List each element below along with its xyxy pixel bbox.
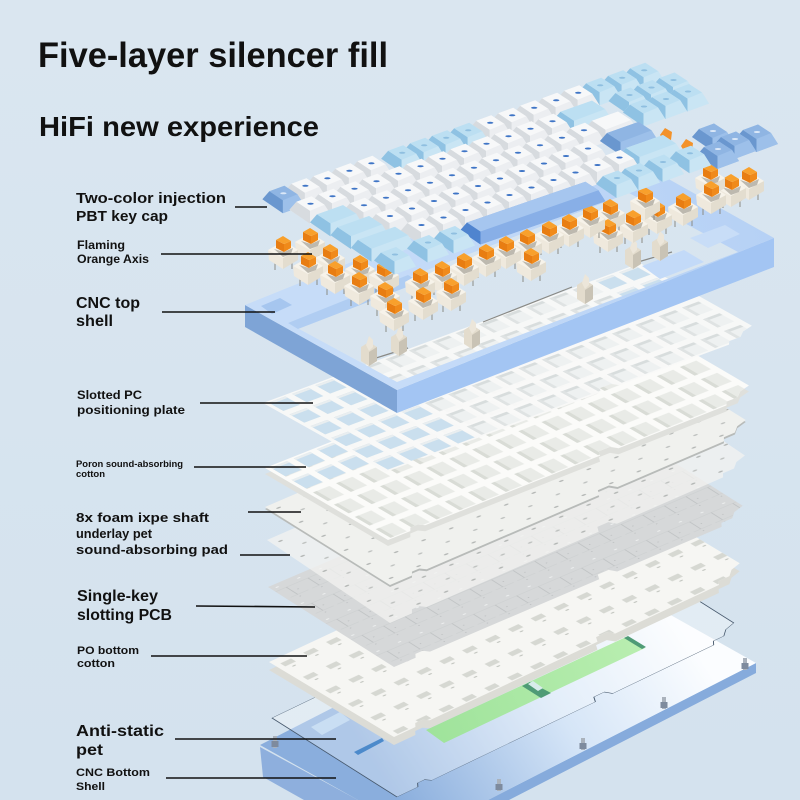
label: PC plate: Slotted PC (77, 390, 142, 402)
label: foam and underlay (76, 510, 301, 557)
label: orange axis (77, 240, 312, 266)
label: PC plate: positioning plate (77, 405, 185, 417)
label: key cap: PBT key cap (76, 208, 168, 225)
label: PO cotton: PO bottom (77, 645, 139, 657)
label: PO cotton: cotton (77, 658, 115, 670)
loose arrow keycaps (692, 124, 778, 169)
layer: slotted PC positioning plate (263, 263, 763, 472)
keycap row: QWERTY (310, 84, 709, 236)
layer: Poron sound-absorbing cotton (265, 320, 760, 546)
label: anti-static pet (76, 723, 336, 759)
keycap row: home row (330, 122, 658, 249)
layer: PO bottom cotton (269, 495, 751, 745)
label: bottom shell: CNC Bottom (76, 767, 150, 779)
icon: screw corner (742, 658, 748, 670)
layer: underlay PET sheet (267, 380, 756, 623)
title: Five-layer silencer fill (38, 36, 388, 75)
label: PCB: Single-key (77, 588, 158, 605)
keycap row: number row (290, 72, 694, 224)
label: Poron cotton: cotton (76, 469, 105, 479)
label: foam and underlay: 8x foam ixpe shaft (76, 510, 210, 525)
green flex strip (426, 636, 646, 743)
label: PO cotton (77, 645, 307, 670)
icon: screw left (272, 736, 278, 748)
label: anti-static pet: pet (76, 742, 103, 759)
keycaps: two-color injection PBT (262, 63, 711, 274)
layer: 8x foam IXPE pad (265, 349, 757, 587)
label: top shell: shell (76, 313, 113, 330)
keycap row: function row (262, 63, 665, 213)
label: PCB: slotting PCB (77, 607, 172, 624)
label: foam and underlay: sound-absorbing pad (76, 542, 228, 557)
layer: single-key slotting PCB (268, 433, 754, 667)
layer: anti-static PET film (272, 551, 745, 797)
layer: CNC top shell (245, 153, 774, 413)
switches: flaming orange axis (268, 164, 764, 332)
subtitle: HiFi new experience (39, 111, 319, 142)
loose orange stems (660, 128, 693, 153)
label: bottom shell: Shell (76, 781, 105, 793)
label: key cap (76, 190, 267, 225)
label: orange axis: Flaming (77, 240, 125, 252)
label: orange axis: Orange Axis (77, 254, 149, 266)
label: Poron cotton (76, 459, 306, 479)
label: top shell (76, 295, 275, 330)
icon: screw right (660, 697, 668, 709)
label: PCB (77, 588, 315, 624)
keycap row: shift row (351, 135, 683, 262)
label: foam and underlay: underlay pet (76, 526, 153, 541)
icon: screw front (496, 779, 502, 791)
stabilizers and wires (361, 231, 672, 366)
icon: screw middle (580, 738, 586, 750)
label: anti-static pet: Anti-static (76, 723, 164, 740)
layer: CNC bottom shell (260, 573, 756, 800)
label: top shell: CNC top (76, 295, 140, 312)
label: bottom shell (76, 767, 336, 793)
keycap row: bottom row with space bar (374, 146, 711, 274)
label: Poron cotton: Poron sound-absorbing (76, 459, 183, 469)
label: key cap: Two-color injection (76, 190, 226, 207)
label: PC plate (77, 390, 313, 417)
